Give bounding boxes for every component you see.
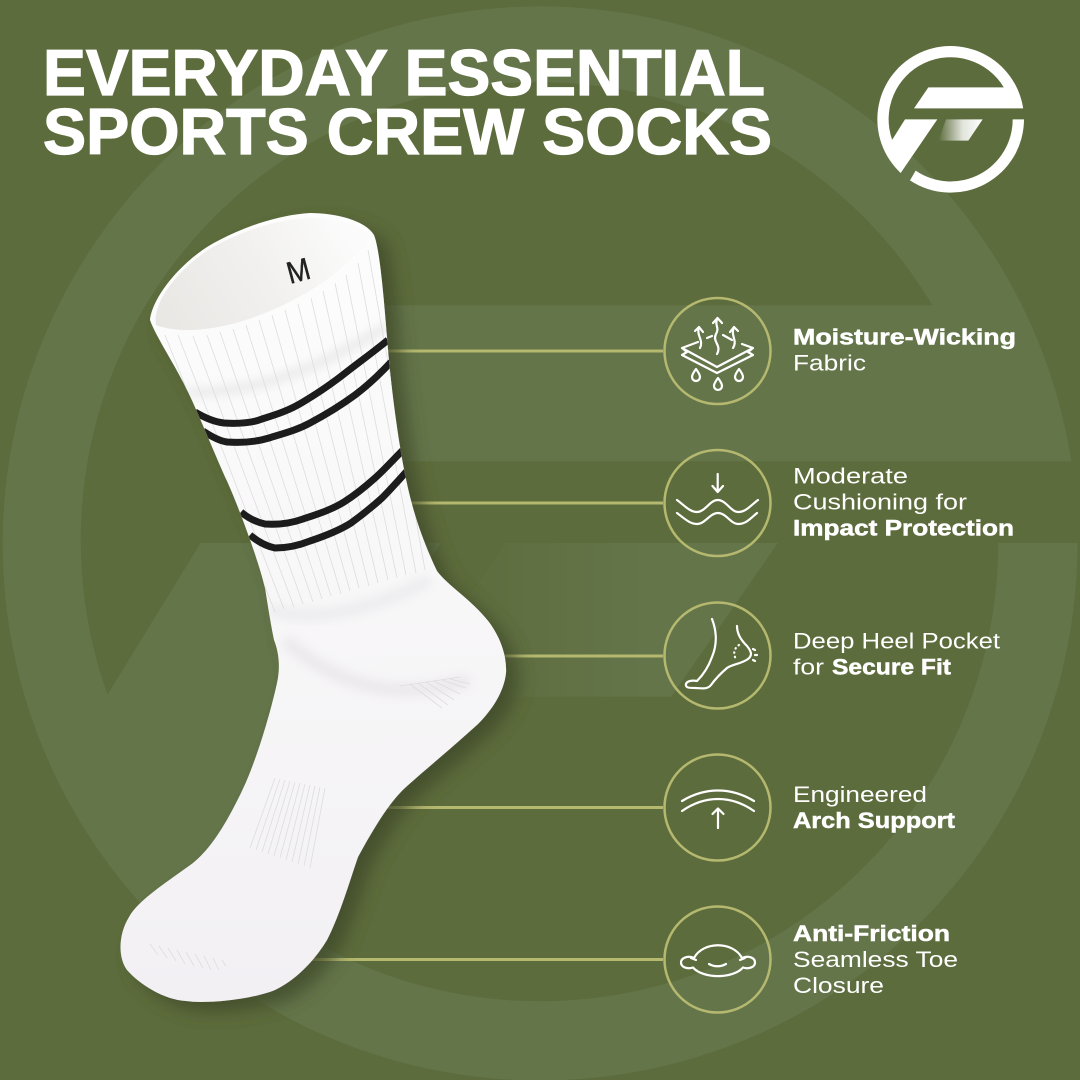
sock stripes xyxy=(195,340,407,548)
sock cuff fold shading xyxy=(187,326,470,690)
sock body xyxy=(120,213,506,1002)
label: anti-friction xyxy=(793,921,958,998)
sock ribbing xyxy=(165,250,425,612)
label: arch support: Engineered xyxy=(793,782,927,807)
label: arch support xyxy=(793,782,956,833)
sock photo illustration xyxy=(120,213,506,1002)
connector lines xyxy=(310,351,663,960)
icon: foot with heel xyxy=(664,602,770,708)
title xyxy=(43,36,772,168)
title: SPORTS CREW SOCKS xyxy=(43,95,772,168)
label: heel pocket xyxy=(793,628,1000,680)
label: anti-friction: Seamless Toe xyxy=(793,947,958,972)
icon: seamless toe xyxy=(664,906,770,1012)
feature 5: anti-friction toe xyxy=(664,906,958,1012)
label: heel pocket: for xyxy=(793,654,824,680)
title: EVERYDAY ESSENTIAL xyxy=(43,36,765,109)
label: moisture-wicking xyxy=(793,324,1016,376)
label: cushioning xyxy=(793,464,1014,540)
feature 3: heel pocket xyxy=(664,602,1000,708)
icon: moisture layers xyxy=(664,298,770,404)
icon: arch with arrow xyxy=(664,754,770,860)
sock heel and toe detail xyxy=(150,677,470,970)
feature 4: arch support xyxy=(664,754,956,860)
sock opening xyxy=(156,218,370,330)
label: cushioning: Impact Protection xyxy=(793,516,1014,540)
label: moisture-wicking: Moisture-Wicking xyxy=(793,324,1016,350)
label: heel pocket: Deep Heel Pocket xyxy=(793,628,1000,654)
label: cushioning: Moderate xyxy=(793,464,908,488)
sock size mark: M xyxy=(283,251,314,291)
label: anti-friction: Anti-Friction xyxy=(793,921,950,946)
label: heel pocket: Secure Fit xyxy=(832,654,952,680)
icon: cushioning waves xyxy=(664,450,770,556)
icon: brand logo xyxy=(877,46,1024,193)
label: arch support: Arch Support xyxy=(793,808,956,833)
label: anti-friction: Closure xyxy=(793,973,884,998)
feature 2: cushioning xyxy=(664,450,1014,556)
label: moisture-wicking: Fabric xyxy=(793,350,866,376)
feature 1: moisture-wicking xyxy=(664,298,1016,404)
label: cushioning: Cushioning for xyxy=(793,490,967,514)
